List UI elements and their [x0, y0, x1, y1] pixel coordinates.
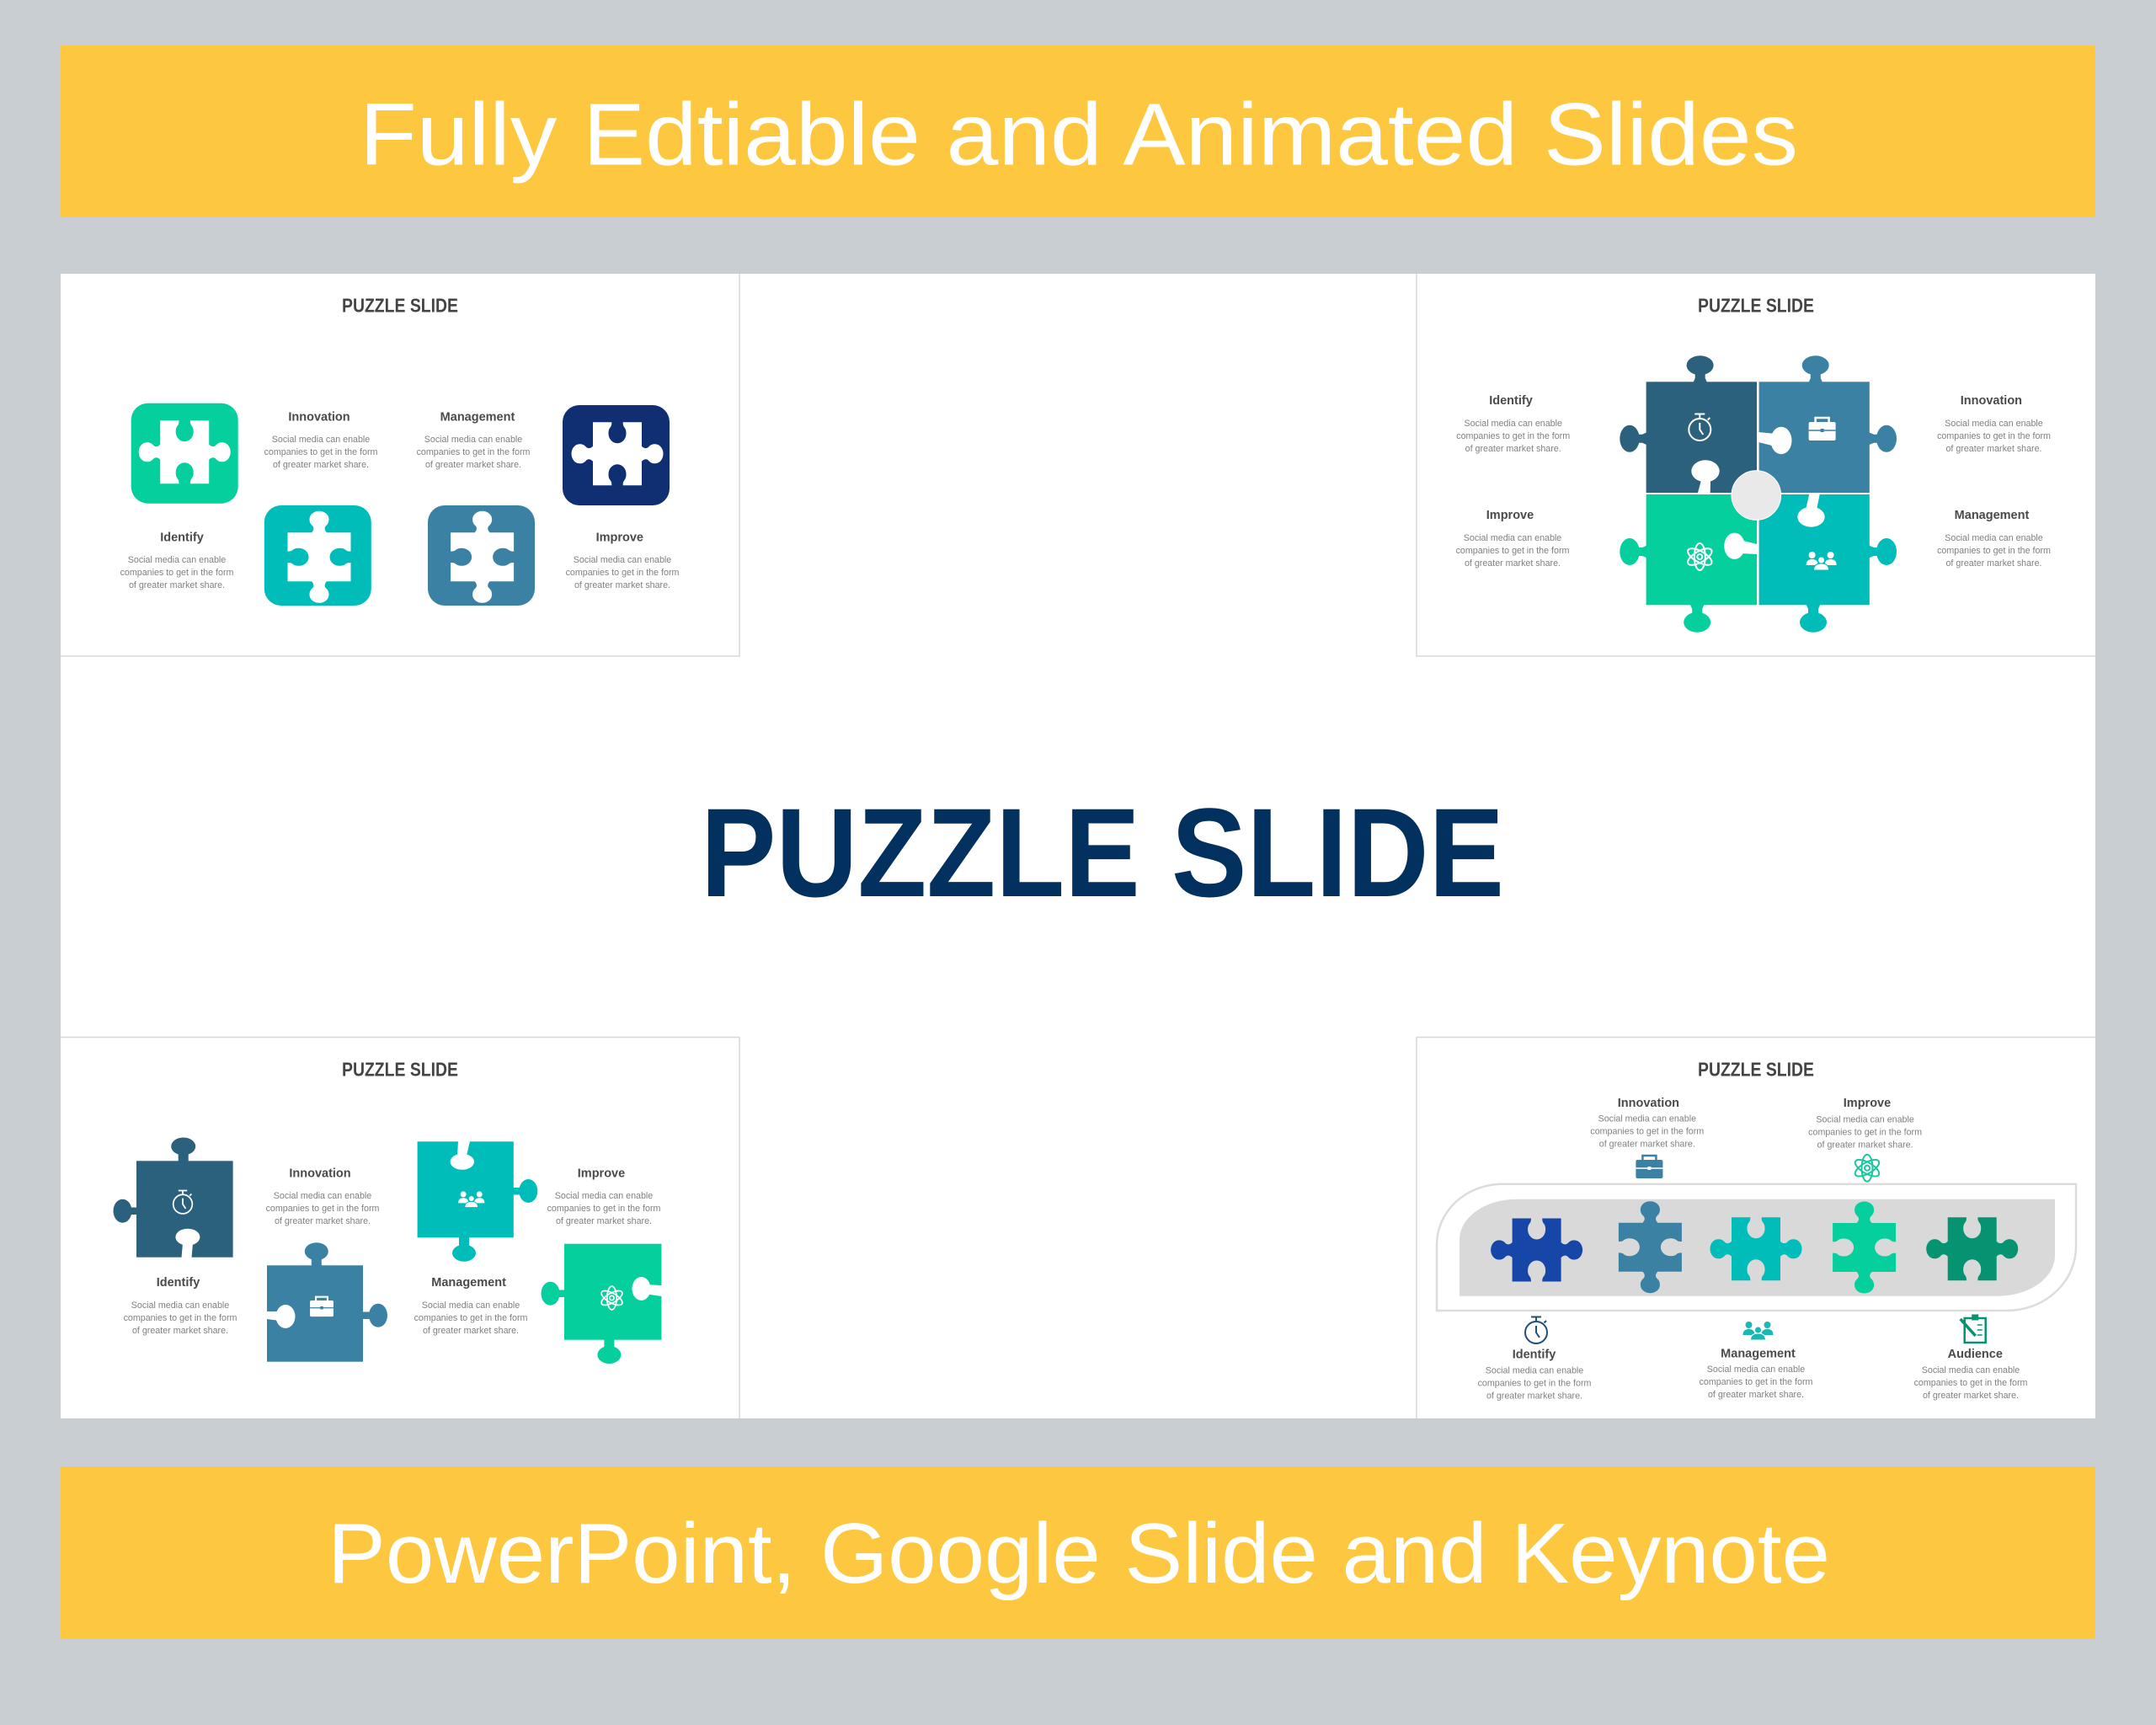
- slide heading: PUZZLE SLIDE: [1698, 1058, 1814, 1080]
- text: Innovation: companies to get in the form: [264, 447, 378, 457]
- text: Improve: of greater market share.: [1817, 1140, 1913, 1151]
- text: Management: Management: [440, 410, 515, 424]
- puzzle piece: steel blue: [1758, 355, 1897, 493]
- text: Identify: [1456, 394, 1570, 454]
- text: Improve: Improve: [596, 531, 643, 544]
- puzzle tile: navy: [563, 405, 670, 505]
- text: Innovation: [1590, 1097, 1704, 1149]
- text: Improve: Improve: [1486, 509, 1534, 522]
- text: Management: companies to get in the form: [1700, 1377, 1813, 1387]
- puzzle piece: teal: [1710, 1217, 1802, 1280]
- text: Identify: [120, 531, 234, 590]
- text: Identify: Social media can enable: [1486, 1366, 1583, 1376]
- panel: slide bottom left, separated pieces: [61, 1037, 739, 1418]
- icon: atom: [1853, 1155, 1881, 1182]
- text: Innovation: of greater market share.: [1599, 1139, 1695, 1149]
- ribbon band: [1460, 1199, 2055, 1296]
- text: Identify: companies to get in the form: [1456, 431, 1570, 441]
- text: Improve: of greater market share.: [556, 1216, 652, 1226]
- icon: atom: [1685, 543, 1714, 570]
- text: Improve: companies to get in the form: [1456, 546, 1570, 556]
- text: Management: companies to get in the form: [417, 447, 531, 457]
- text: Innovation: Social media can enable: [274, 1191, 371, 1201]
- bottom banner: [61, 1466, 2095, 1639]
- text: Management: Management: [1721, 1347, 1796, 1360]
- icon: people: [1806, 552, 1837, 570]
- icon: stopwatch: [1525, 1317, 1547, 1343]
- text: Management: companies to get in the form: [414, 1313, 528, 1323]
- text: Innovation: of greater market share.: [1945, 444, 2042, 454]
- text: Improve: Social media can enable: [1816, 1115, 1914, 1125]
- text: Improve: Improve: [1844, 1097, 1891, 1110]
- puzzle tile: teal: [264, 505, 371, 606]
- center circle: [1732, 471, 1781, 520]
- text: Audience: Audience: [1948, 1348, 2003, 1361]
- text: Identify: [124, 1276, 237, 1336]
- puzzle piece: steel blue: [1619, 1201, 1682, 1293]
- text: Improve: [547, 1167, 661, 1226]
- text: Innovation: Innovation: [288, 410, 350, 424]
- text: Identify: [1478, 1348, 1592, 1402]
- text: Improve: companies to get in the form: [566, 568, 680, 578]
- text: Identify: of greater market share.: [132, 1326, 228, 1336]
- puzzle piece: steel blue: [266, 1242, 387, 1362]
- text: Identify: of greater market share.: [129, 580, 225, 590]
- text: Identify: Social media can enable: [1464, 419, 1562, 429]
- panel: slide top right, four-piece puzzle: [1417, 274, 2095, 656]
- text: Audience: [1914, 1348, 2028, 1401]
- text: Innovation: [1937, 394, 2051, 454]
- text: Improve: companies to get in the form: [547, 1204, 661, 1214]
- text: Identify: of greater market share.: [1465, 444, 1561, 454]
- text: Improve: Social media can enable: [1464, 533, 1561, 543]
- top banner: [61, 45, 2095, 217]
- bottom banner: PowerPoint, Google Slide and Keynote: [328, 1507, 1830, 1601]
- ribbon outline: [1437, 1184, 2076, 1311]
- text: Identify: Identify: [1489, 394, 1533, 408]
- icon: briefcase: [1809, 418, 1836, 441]
- text: Improve: Social media can enable: [555, 1191, 653, 1201]
- text: Innovation: companies to get in the form: [1937, 431, 2051, 441]
- slide heading: PUZZLE SLIDE: [342, 1058, 458, 1080]
- text: Identify: Social media can enable: [128, 555, 226, 565]
- text: Management: companies to get in the form: [1937, 546, 2051, 556]
- puzzle piece: green: [541, 1244, 662, 1364]
- text: Innovation: Innovation: [1618, 1097, 1679, 1110]
- icon: stopwatch: [1689, 414, 1710, 441]
- text: Management: Social media can enable: [424, 435, 522, 445]
- puzzle piece: dark blue: [1620, 355, 1757, 493]
- puzzle tile: blue: [428, 505, 535, 606]
- text: Management: of greater market share.: [1945, 558, 2042, 569]
- text: Innovation: Social media can enable: [1598, 1114, 1696, 1124]
- text: Management: Social media can enable: [422, 1300, 520, 1311]
- panel: slide bottom right, puzzle ribbon: [1417, 1037, 2095, 1418]
- puzzle piece: teal: [418, 1141, 537, 1262]
- text: Identify: Identify: [1513, 1348, 1556, 1362]
- text: Identify: companies to get in the form: [124, 1313, 237, 1323]
- text: Audience: companies to get in the form: [1914, 1378, 2028, 1388]
- text: Management: [1937, 509, 2051, 569]
- text: Innovation: companies to get in the form: [1590, 1127, 1704, 1137]
- text: Innovation: of greater market share.: [275, 1216, 371, 1226]
- text: Audience: Social media can enable: [1922, 1365, 2020, 1375]
- text: Identify: Identify: [157, 1276, 200, 1290]
- text: Audience: of greater market share.: [1923, 1391, 2019, 1401]
- text: Improve: of greater market share.: [574, 580, 670, 590]
- text: Identify: Social media can enable: [131, 1300, 229, 1311]
- text: Innovation: Social media can enable: [1945, 419, 2043, 429]
- icon: briefcase: [1636, 1156, 1662, 1178]
- text: Improve: [566, 531, 680, 590]
- text: Identify: of greater market share.: [1486, 1391, 1582, 1402]
- icon: stopwatch: [173, 1191, 192, 1214]
- icon: atom: [600, 1286, 624, 1310]
- text: Innovation: companies to get in the form: [266, 1204, 380, 1214]
- text: Management: Management: [431, 1276, 506, 1290]
- text: Management: of greater market share.: [1708, 1390, 1804, 1400]
- text: Innovation: Innovation: [289, 1167, 351, 1180]
- text: Management: Social media can enable: [1707, 1365, 1805, 1375]
- puzzle piece: teal: [1759, 494, 1897, 633]
- text: Improve: Social media can enable: [574, 555, 671, 565]
- text: Management: [414, 1276, 528, 1336]
- text: Identify: companies to get in the form: [120, 568, 234, 578]
- icon: people: [458, 1191, 484, 1208]
- text: Improve: of greater market share.: [1465, 558, 1561, 569]
- puzzle piece: blue: [1491, 1218, 1582, 1282]
- text: Innovation: Innovation: [1961, 394, 2022, 408]
- text: Improve: companies to get in the form: [1808, 1127, 1922, 1137]
- puzzle piece: green: [1833, 1201, 1896, 1294]
- text: Innovation: of greater market share.: [273, 460, 369, 470]
- top banner: Fully Edtiable and Animated Slides: [360, 86, 1798, 184]
- main title: PUZZLE SLIDE: [701, 782, 1504, 923]
- text: Identify: Identify: [160, 531, 204, 544]
- text: Management: [1700, 1347, 1813, 1400]
- icon: clipboard: [1961, 1315, 1986, 1343]
- text: Innovation: [266, 1167, 380, 1226]
- puzzle piece: dark blue: [113, 1137, 233, 1258]
- text: Management: of greater market share.: [423, 1326, 519, 1336]
- slide heading: PUZZLE SLIDE: [1698, 295, 1814, 317]
- text: Improve: Improve: [578, 1167, 625, 1180]
- text: Management: of greater market share.: [425, 460, 521, 470]
- central white panel: [61, 274, 2095, 1418]
- puzzle piece: green: [1620, 494, 1757, 633]
- icon: people: [1743, 1322, 1774, 1340]
- text: Innovation: [264, 410, 378, 470]
- text: Innovation: Social media can enable: [272, 435, 370, 445]
- text: Management: Management: [1955, 509, 2029, 522]
- text: Improve: [1808, 1097, 1922, 1151]
- text: Management: Social media can enable: [1945, 533, 2043, 543]
- slide heading: PUZZLE SLIDE: [342, 295, 458, 317]
- text: Improve: [1456, 509, 1570, 569]
- text: Identify: companies to get in the form: [1478, 1378, 1592, 1388]
- puzzle piece: dark green: [1926, 1217, 2018, 1280]
- icon: briefcase: [310, 1297, 334, 1316]
- text: Management: [417, 410, 531, 470]
- puzzle tile: green: [131, 403, 238, 504]
- panel: slide top left, rounded tiles: [61, 274, 739, 656]
